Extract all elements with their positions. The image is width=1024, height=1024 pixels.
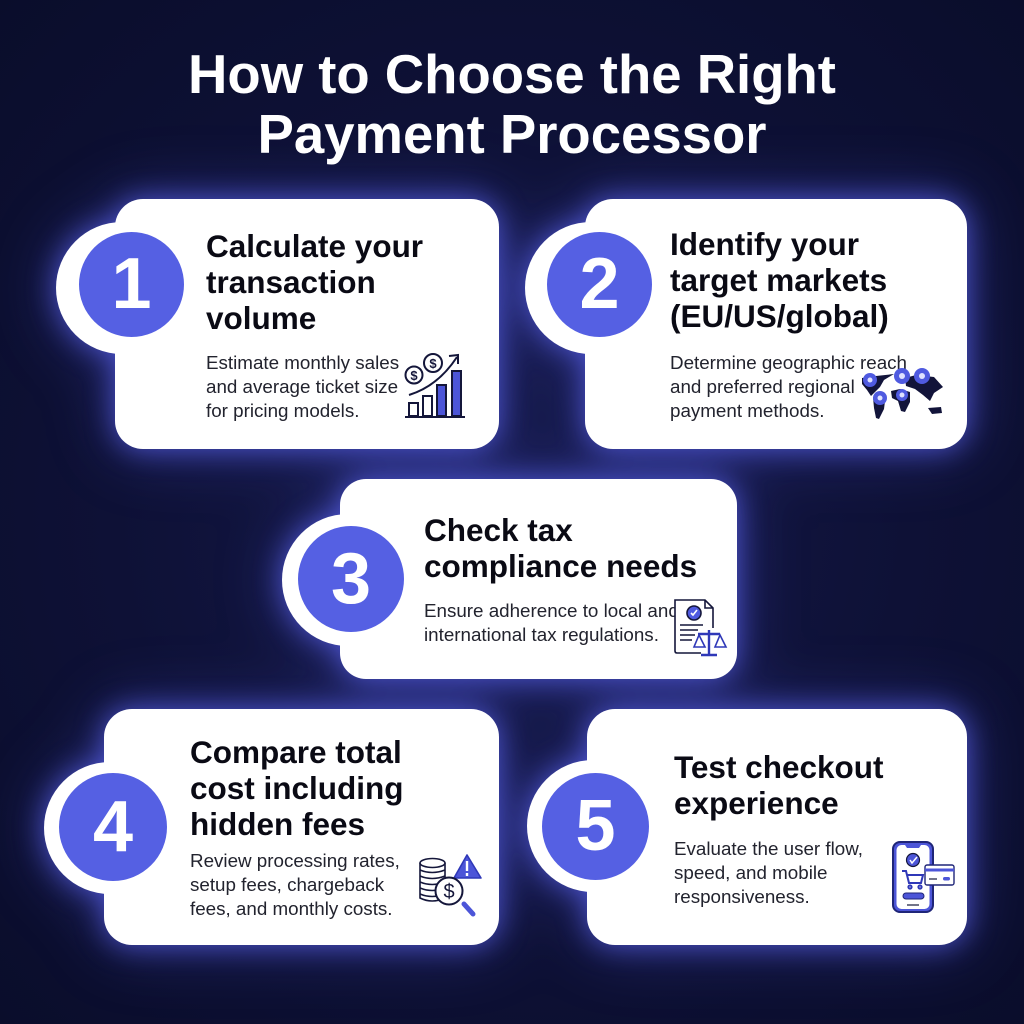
text: step 5 [674,838,863,907]
text: step 2: Determine geographic reach [670,352,907,373]
number badge 2 [547,232,652,337]
heading: step 4: cost including [190,770,404,806]
text: step 1: and average ticket size [206,376,398,397]
icon: phone checkout with card [892,841,955,913]
heading: step 2 [670,226,889,334]
icon: tax document with scales [674,599,728,656]
text: step 4: fees, and monthly costs. [190,898,393,919]
panel: step 5 [542,749,955,913]
heading: step 1: transaction [206,264,376,300]
text: step 5: speed, and mobile [674,862,828,883]
number badge 3 [298,526,404,632]
text: step 2: payment methods. [670,400,825,421]
number badge 1: 1 [111,244,152,324]
number badge 4: 4 [93,787,133,867]
heading: step 5 [674,749,884,821]
number badge 3: 3 [331,539,371,619]
panel: step 4 [59,734,482,919]
title: Payment Processor [258,104,766,165]
title: How to Choose the Right [188,44,836,105]
text: step 4 [190,850,400,919]
icon: growth chart with coins: $ [410,368,418,383]
text: step 2: and preferred regional [670,376,855,397]
number badge 5 [542,773,649,880]
text: step 3: Ensure adherence to local and [424,600,679,621]
text: step 4: setup fees, chargeback [190,874,384,895]
panel: step 2 [547,226,943,421]
number badge 4 [59,773,167,881]
icon: coins, warning and magnifier [419,854,482,916]
number badge 2: 2 [579,244,620,324]
text: step 4: Review processing rates, [190,850,400,871]
text: step 3 [424,600,679,645]
text: step 5: Evaluate the user flow, [674,838,863,859]
heading: step 5: Test checkout [674,749,883,785]
panel: step 1 [79,228,465,421]
title [188,44,836,165]
heading: step 1 [206,228,423,336]
icon: coins, warning and magnifier: $ [443,881,455,903]
text: step 3: international tax regulations. [424,624,659,645]
heading: step 2: (EU/US/global) [670,298,889,334]
number badge 1 [79,232,184,337]
heading: step 2: target markets [670,262,887,298]
icon: growth chart with coins [404,353,465,418]
icon: growth chart with coins: $ [429,356,437,371]
number badge 5: 5 [575,786,616,866]
text: step 2 [670,352,907,421]
heading: step 4 [190,734,404,842]
heading: step 3: Check tax [424,512,573,548]
heading: step 4: hidden fees [190,806,365,842]
text: step 1 [206,352,399,421]
heading: step 1: Calculate your [206,228,423,264]
text: step 1: for pricing models. [206,400,359,421]
heading: step 4: Compare total [190,734,402,770]
panel: step 3 [298,512,728,656]
icon: world map with pins [862,368,943,419]
text: step 1: Estimate monthly sales [206,352,399,373]
heading: step 2: Identify your [670,226,859,262]
heading: step 1: volume [206,300,316,336]
text: step 5: responsiveness. [674,886,810,907]
heading: step 5: experience [674,785,839,821]
heading: step 3 [424,512,697,584]
heading: step 3: compliance needs [424,548,697,584]
